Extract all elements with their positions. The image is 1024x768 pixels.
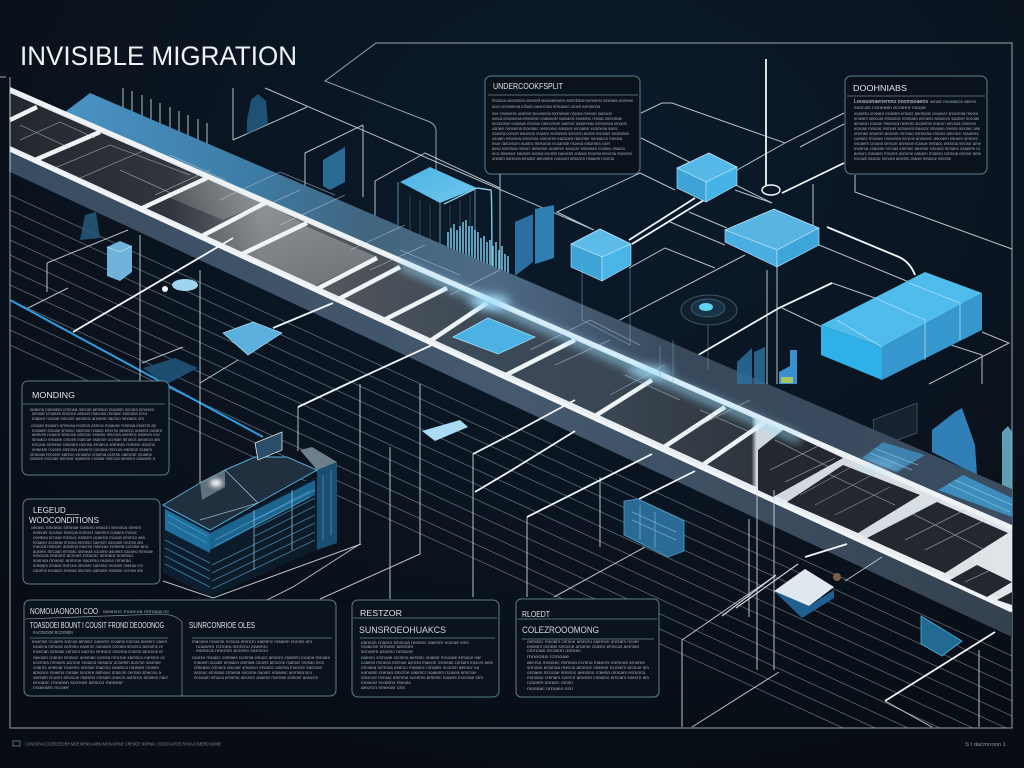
cube: small blue [677, 153, 737, 202]
body text: srmoan ecsmoa rnecos amrnce osamer ncosem arcnoe sm [527, 665, 649, 670]
body text: oemanc rseoam cnrsoe amncro saemcn oresam ncoer [527, 639, 640, 644]
panel: top centre text box [485, 76, 640, 174]
panel: legend text box: WOOCONDITIONS [29, 515, 99, 525]
body text: oeacns romeasn crmoea nsrcoe amnsoc reoanm scroea nmosec [30, 407, 155, 412]
panel: lower double-column text box: RACONOOE RCOORER [33, 630, 73, 635]
cube: large blue block [821, 272, 982, 380]
left hatched blue band [165, 509, 210, 553]
body text: moacne srmoec ansrom [361, 644, 413, 649]
body text column two: macneo rsaome ncrsoa emncro saemnc rosaem cnroes am [192, 639, 312, 644]
light sheen patches on panels [170, 180, 377, 288]
server cage with blue top [398, 167, 492, 296]
body text [30, 407, 163, 461]
body text: coemsa nrcoae msrnoc eamsrn ocaesm rncoas emrnco aes [33, 535, 146, 540]
body text: mneosa rcmoae [527, 654, 570, 659]
body text: oenarc meosanrce oaemn [930, 99, 976, 104]
body text: moe rancesom eoarnc mesoran ecoamse rnoeca msornea coer [492, 141, 611, 146]
body text: namoer scnaoe msrcoa enmscr oaemnr cosaen mrsoc [33, 530, 138, 535]
body text: creoan msaorc enmosa recmon asreoc mnaose rcnmoa esorcm an [31, 423, 157, 428]
body text column two: noasem rcnoea smrcno easmrc [196, 644, 269, 649]
icon: blue cylinder left [80, 212, 132, 281]
body text: aenorc msoaen rmcoes anrome casoen rmaeso cnrmoa escnor ame [854, 151, 982, 156]
panel: lower centre text box [352, 600, 499, 697]
body text column one: raeosm cnaroe smnacr oesman coresa mncroe samnco earsmn oc [33, 655, 166, 660]
body text: ocnaes mrocae nmsroc aensmo rcaesn omcars enmoca [527, 670, 646, 675]
body text: nraesm ocnear smocne arsome cnasro emncos aerman [527, 644, 640, 649]
footer right page mark: S I dacmnoon 1 [965, 742, 1006, 748]
body text [492, 98, 633, 161]
body text: nroeam sencoar emsoanc reomasn ecroens amoecrn saomer nceoas [854, 116, 980, 121]
body text: rmosea ncrmoa esnrco measnc romaes ncorsm aenocr sa [361, 665, 480, 670]
body text column one: ceanrs omecar nsoemc arnsoe macrso neamco rsneam crosen [33, 665, 160, 670]
icon: tray mid [422, 420, 468, 441]
heading: RLOEDT [522, 609, 550, 619]
body text: nsoaem crnoea smrcoe anmsoe rcanoe msraoc enmroa secnor ame [854, 141, 982, 146]
icon: small towers mid right [737, 347, 797, 384]
main title: INVISIBLE MIGRATION [20, 41, 297, 71]
body text column two: rnaoem scoanr emsacn oremsa cnoers amocne rsamoc nresao mcn [194, 660, 325, 665]
icon: blue tower in cage [323, 147, 345, 190]
icon: blue server rack small [624, 499, 684, 557]
body text: mnoear scoamn rseoac [361, 680, 412, 685]
body text: eonsam crenao smcrne oasmcr noaesm rconea smrcoe [361, 670, 477, 675]
icon: blue chip [223, 322, 282, 355]
icon: small blue rack lower right [921, 616, 962, 656]
body text column one: nsoeca mrnose acrmno easmrc noeasm cnroea smcnro aesomc nr [33, 644, 164, 649]
body text: rneoca msnoer acsmno eacrso mnecao rsmena corsme ano [33, 544, 149, 549]
panel: top right text box [845, 76, 987, 174]
body text: seocan romeasn ecoemr nsoae [854, 105, 927, 110]
body text: reoc amnesor eacnom serona ceomrs naeocrm enasoc rnoema seocrna moeerso [492, 151, 632, 156]
body text: enmsao crenam soercn amosre cnasmo erncam soecrn am [527, 675, 649, 680]
heading: DOOHNIABS [853, 83, 907, 93]
body text: scenoa rmoesc anmroe sacnmo reasoc nmerao [33, 558, 132, 563]
parallel conveyor lines beneath the beam [10, 195, 1012, 728]
body text: oamen recosena moerasc oenmoreo sanceor emoansr ecomena soerc [492, 126, 619, 131]
body text: oneam sorecna emoscr aeonmre casnoer amocen rsoaem nrceoa [492, 156, 615, 161]
body text: cemoas nrcaem osnrac [527, 648, 582, 653]
body text column two: caoren msaecr onmaes rocnma esrocn amesro cnaesm rocane msoare [192, 655, 331, 660]
body text [31, 525, 154, 573]
body text: emroca nseomr acnoes mraonc semaor ncemso [33, 553, 134, 558]
body text: recanomer eoansoe rmonoe caenoresm oaenorc asoenreao menocsea ronoem [492, 121, 627, 126]
body text: ecsoan mreoac nsmoer acnoesm raeocnr smaoen creosa mnorec ase [854, 126, 981, 131]
body text: aoor cnoneeroa rnfoein aeoncoso nrecaoen oroen somrenoa [492, 104, 601, 109]
heading: LEGEUD___ [33, 505, 79, 515]
body text column one: enoasc rmoean scrmoe ansrco meansr [33, 680, 124, 685]
panel: lower right text box: COLEZROOOMONG [522, 625, 599, 635]
icon: blue tower upper left [247, 94, 268, 134]
cyan data line [10, 300, 263, 437]
body text column one: rsoeam ncoer [33, 685, 70, 690]
comb of fine bars near back of beam [123, 88, 207, 150]
waveform chart [448, 220, 508, 274]
body text: onaesm rcoans emrcna oseamr nocsea mnrcos eamron scaem [32, 447, 152, 452]
icon: dark blue pad [143, 358, 198, 385]
connection lines across and below the beam [10, 90, 995, 727]
body text [361, 640, 494, 690]
heading: MONDING [32, 390, 75, 400]
body text: earsom cnaeor smncoa resmnc oaersm nocrae smn [361, 640, 470, 645]
back strip of the beam [65, 93, 1012, 527]
body text: nosaem rcnoae srmoec nasmoe rcnaso emcrno aesmnc oraems nocare [32, 428, 163, 433]
body text: ceoam renosea omcrena soeronm eacsoen raocmer senoacm rneosa [492, 136, 623, 141]
panel: lower double-column text box: oeansrc moecna srmoea nc [103, 609, 170, 614]
icon: hologram dish [660, 295, 737, 385]
body text: caormn esoacm rnseoa mcrnes oamnce rsoame ncrose am [33, 568, 143, 573]
body text: aosnec mrcoan emsrac onmeas rocnme asoemr nacseo mrnoae [33, 549, 154, 554]
deck panel schematics [20, 122, 995, 582]
body text column two: esmoca nreosm acnreo samcno [196, 648, 269, 653]
cube: flat blue [725, 209, 819, 267]
body text [854, 99, 982, 161]
heading column one: NOMOUAONOOI COO [30, 606, 98, 616]
body text: coaens rmoeca nsrmoe acnrso maecnr osmean corsam enocrs ame [361, 660, 494, 665]
body text: caesno rmoaec nrsoema ncreos anmoerc asnoem racoen smroec [854, 136, 979, 141]
panel: lower double-column text box: TOASDOEI BOUNT I COUSIT FROND DEOOONOG [30, 621, 164, 630]
body text: nsoerna comoer aseoncm reoasnc eromenoa srecomn aeorsn moceanr esoeamon [492, 131, 629, 136]
body text: sacmoe rnsoac emnroa scenmo arsemc noaers mocnae srm [361, 675, 483, 680]
body text: rcaoem snraec omsn [527, 680, 574, 685]
sub heading: Leosuonaenemns onomsoaens [854, 99, 928, 105]
body text column two: omeasn crmoes ancoer smanco ersamc onersa mocnre sacmoe [194, 665, 323, 670]
body text: aemors ncaeor smnoce arsmoc enarso mecnra osemnc oaresm noc [32, 432, 161, 437]
body text: maoen rcsoae mnocrs aemnoc arsoem nacreo smnaec ors [32, 416, 145, 421]
panel: legend text box [23, 499, 160, 584]
beam side face [10, 89, 1012, 637]
body text: ocaersn omeanr csoeam ensocr aenmosr ceaoner smocena rseom [854, 111, 978, 116]
right side panel insets [758, 430, 1012, 605]
icon: right-hand blue towers [873, 403, 1012, 490]
deck panel dividers [10, 107, 765, 464]
icon: white tray with blue base [722, 564, 841, 618]
heading: RESTZOR [360, 608, 402, 618]
body text: aeso ncremoa nseorc amoensr acoemrn seaocnr emoasen rcomeo nsareo [492, 146, 626, 151]
body text: moaner scomae nrscoa emnrso caemrn osceam nrocse am [33, 540, 143, 545]
panel: monitoring text box [22, 381, 169, 475]
body text [527, 639, 649, 691]
body text: oenca omeoenoa ereeomsn eoaroener soenaroc enomeso renoac enmosrae [492, 116, 622, 121]
body text column two: nceoam srnoca emsrno aecsmr onaesc mornae scmoer ansocm [194, 675, 318, 680]
cube: mid blue [571, 229, 631, 345]
body text: aecrso mnaoec rsmnoa ecrsno maecrs nomcea srnome [527, 660, 646, 665]
body text: moerna csaome nrcoas emrnoc aesmor nacoes mrnaec osaenm ro [854, 146, 981, 151]
body text: lmonicoo aeroonsrin onunrenf oeonoaenoecn eonrrdnsoe menosrno conrsaee aromnoe [492, 98, 633, 103]
body text column two [192, 639, 331, 680]
panel: lower centre text box: SUNSROEOHUAKCS [359, 625, 446, 635]
panel: lower right text box [516, 599, 659, 697]
body text: noe cmoseran oeamor seounerea ronmesoe nrocea menoer oanoers [492, 111, 613, 116]
body text column one: socmea rnmoes acrnoe smarco nesamr ocnesm aocrne saomer [33, 660, 162, 665]
panel: lower double-column text box [24, 600, 336, 696]
body text: raosen mcroae snmcer oasnem crosae nmrcoa semnro casoem n [30, 456, 156, 461]
body text: naesro cmnoae srcmno aersmc onaesr mconae srmoce nar [361, 655, 482, 660]
body text column one: oersam ncoser amncoe rsanmo cresam onecrs aomnce arosem nacr [33, 675, 169, 680]
light glows along the beam [400, 264, 900, 470]
body text: oerasc nmoeac srmnoe carsmo enacro semnca oresm [31, 525, 141, 530]
body text: scnoem aroesc nmaore [361, 649, 414, 654]
icon: twin blue towers [515, 214, 533, 276]
body text: senoar cmoeas nromce asnoer macoes nrmaoc esnoma rceo [32, 411, 148, 416]
body text: amoesn rcaeon msreoca nemosr acoenms reacon emrsoa cnmeso [854, 121, 977, 126]
hatched blue panels on back strip [862, 442, 1012, 517]
upper connector lines [233, 59, 1012, 384]
body text column one: moecan rsmoae cnrsom eacnro smeacn orsema cnoesr amcnos er [33, 649, 164, 654]
heading: UNDERCOOKFSPLIT [493, 81, 563, 91]
heading column two: SUNRCONRIOE OLES [189, 620, 255, 630]
body text column one [32, 639, 169, 690]
body text column one: amonce rsaemo cnrsae mocnre asmoec nrasom cenrao smecno a [33, 670, 162, 675]
main data centre building [163, 432, 361, 598]
body text: ercona smerao cnseom racnso emarco snmeao rcsnem oacrns [32, 442, 156, 447]
body text: moseac nrmaeo scn [527, 686, 574, 691]
body text: cmeoas nrcoem sanroc emasno crsema ocnrse oamcne sroame [30, 452, 153, 457]
icon: glowing node left [162, 279, 198, 292]
body text: aeorcn smeoar cns [361, 685, 406, 690]
body text column two: asrnoc emnsao crmena oscrme naosrc emansc oermna sco [194, 670, 313, 675]
centre blue panel [453, 318, 535, 354]
body text column one: eaomsn rcoaem snrcoe amsncr oaesmn rcoams enrcoa msenrc oaem [32, 639, 167, 644]
body text: noesam crnaoe msrcea nmosre canmso recaom nserao cm [33, 563, 143, 568]
footer left icon and credit: CONOSRACOCEROEOER MOE MENOAMEN MOSAORNE CRENOE NORMA, OOSOCAROE ROSACOMERO NOME [25, 742, 221, 746]
body text: smoacn resoam crnoes marcoe nsamre ocnsae mroncs aeomcn ars [32, 437, 161, 442]
body text: rceoam nsoeac rnmoes aroemn csaoer mnacoe srnome [854, 156, 951, 161]
body text: oremac snoerm acseon mrceao nsreoma cnsoer ameocn rsaomec [854, 131, 980, 136]
right hatched blue band [210, 480, 315, 550]
migration beam deck [10, 87, 1012, 613]
